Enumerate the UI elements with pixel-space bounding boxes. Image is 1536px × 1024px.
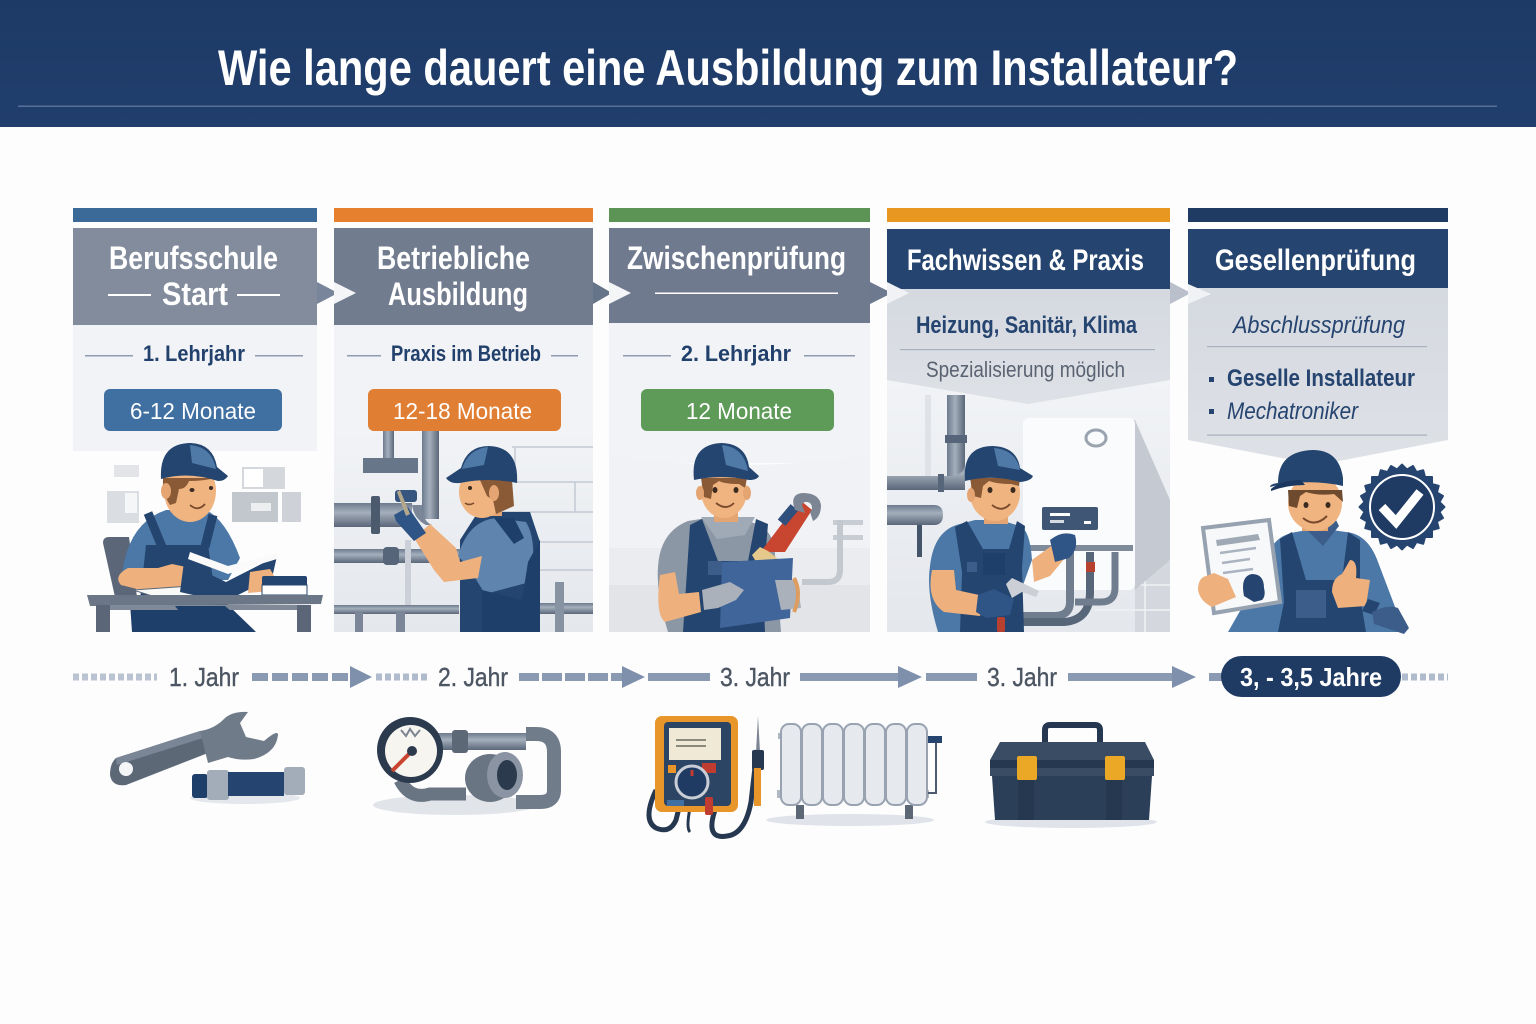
top bar [887, 208, 1170, 222]
scene: apprentice at pipes [334, 431, 593, 632]
info background [609, 323, 870, 463]
heading block [609, 228, 892, 323]
heading block: Gesellenprüfung [1215, 244, 1416, 277]
label: Spezialisierung möglich: Spezialisierung möglich [926, 357, 1125, 382]
icon: seal with check mark [1358, 463, 1446, 551]
label: 1. Jahr: 1. Jahr [169, 662, 239, 692]
heading block [887, 229, 1191, 404]
badge: 6-12 Monate: 6-12 Monate [130, 398, 256, 424]
figure: journeyman with certificate [1198, 450, 1409, 634]
badge: 6-12 Monate [104, 389, 282, 431]
top bar [334, 208, 593, 222]
heading block [73, 228, 338, 325]
arrow [519, 666, 645, 688]
dashed segment [376, 674, 427, 680]
top bar [73, 208, 317, 222]
panel: Berufsschule Start [73, 208, 338, 632]
label: 1. Lehrjahr: 1. Lehrjahr [143, 341, 245, 366]
heading block [334, 228, 612, 325]
label: 2. Lehrjahr: 2. Lehrjahr [681, 341, 791, 366]
badge: 12 Monate [641, 389, 834, 431]
icon: radiator [766, 724, 942, 826]
info background [334, 325, 593, 632]
scene: apprentice reading at desk [87, 443, 323, 632]
heading block: Berufsschule [109, 240, 278, 276]
dashed segment [1402, 674, 1448, 680]
top bar [609, 208, 870, 222]
title: Wie lange dauert eine Ausbildung zum Installateur? [218, 40, 1238, 96]
heading block [1188, 229, 1448, 465]
pill: 3, - 3,5 Jahre: 3, - 3,5 Jahre [1240, 662, 1382, 692]
label: Praxis im Betrieb: Praxis im Betrieb [391, 341, 541, 366]
heading block: Start [162, 276, 228, 312]
panel: Zwischenprüfung [609, 208, 892, 632]
panel: Betriebliche Ausbildung [334, 208, 612, 632]
top bar [1188, 208, 1448, 222]
label: 2. Jahr: 2. Jahr [438, 662, 508, 692]
arrow [252, 666, 372, 688]
header band [0, 0, 1536, 127]
panel: Fachwissen & Praxis [887, 208, 1191, 632]
badge: 12 Monate: 12 Monate [686, 398, 792, 424]
heading block: Ausbildung [388, 276, 528, 312]
badge: 12-18 Monate [368, 389, 561, 431]
icon: multimeter [649, 716, 764, 836]
arrow [1068, 666, 1196, 688]
list: qualifications [1209, 365, 1415, 425]
arrow [800, 666, 922, 688]
scene: apprentice at boiler [887, 380, 1170, 632]
icon: toolbox [985, 725, 1157, 828]
badge: 12-18 Monate: 12-18 Monate [393, 398, 532, 424]
label: Heizung, Sanitär, Klima: Heizung, Sanitär, Klima [916, 312, 1138, 339]
panel: Gesellenprüfung [1188, 208, 1448, 634]
list: qualifications: Geselle Installateur [1227, 365, 1415, 392]
heading block: Betriebliche [377, 240, 530, 276]
list: qualifications: Mechatroniker [1227, 398, 1359, 425]
icon: wrench and pipe fitting [110, 712, 305, 804]
timeline [73, 656, 1448, 697]
scene: apprentice with clipboard and pipe wrench [609, 443, 870, 632]
heading block: Zwischenprüfung [627, 240, 846, 276]
info background [73, 325, 317, 451]
pill: 3, - 3,5 Jahre [1221, 656, 1401, 697]
label: Abschlussprüfung: Abschlussprüfung [1231, 312, 1406, 339]
icon: pressure gauge and pipes [373, 717, 554, 815]
heading block: Fachwissen & Praxis [907, 244, 1144, 277]
dashed segment [73, 674, 157, 680]
label: 3. Jahr: 3. Jahr [720, 662, 790, 692]
label: 3. Jahr: 3. Jahr [987, 662, 1057, 692]
